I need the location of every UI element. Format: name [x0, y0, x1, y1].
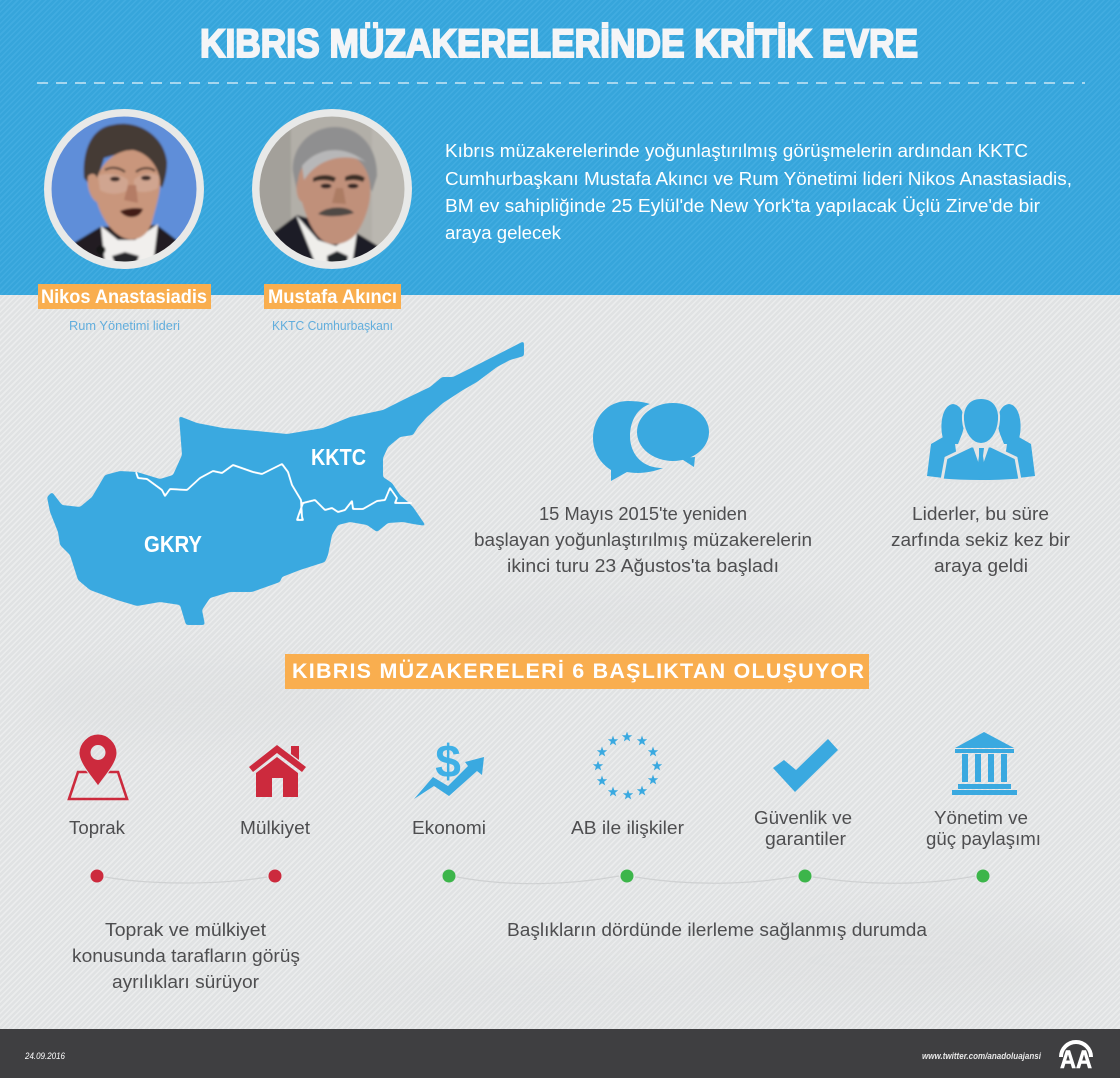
text: negotiations: ikinci turu 23 Ağustos'ta başladı: [507, 556, 779, 576]
label: Toprak: Toprak: [69, 818, 126, 838]
intro paragraph: BM ev sahipliğinde 25 Eylül'de New York'ta yapılacak Üçlü Zirve'de bir: [445, 196, 1040, 216]
intro paragraph: [445, 141, 1072, 243]
label: Yönetim ve güç paylaşımı: güç paylaşımı: [926, 829, 1041, 849]
icon: government building: [952, 732, 1017, 795]
text: leaders met: araya geldi: [934, 556, 1028, 576]
status dots: progress: [442, 870, 990, 882]
icon: group of leaders: [927, 398, 1035, 482]
label: Ekonomi: Ekonomi: [412, 818, 486, 838]
map of Cyprus: [47, 341, 524, 625]
icon: map pin: [69, 734, 127, 799]
label: Güvenlik ve garantiler: Güvenlik ve: [754, 808, 852, 828]
text: negotiations: başlayan yoğunlaştırılmış müzakerelerin: [474, 530, 812, 550]
text: negotiations: [474, 504, 812, 576]
text: progress note: Başlıkların dördünde ilerleme sağlanmış durumda: [507, 920, 928, 940]
icon: speech bubbles: [593, 401, 709, 481]
name tag: Mustafa Akıncı: Mustafa Akıncı: [268, 287, 397, 308]
text: leaders met: [891, 504, 1070, 576]
text: disagreement note: [72, 920, 300, 992]
logo: AA: AA: [1060, 1046, 1092, 1074]
text: leaders met: Liderler, bu süre: [912, 504, 1049, 524]
title: KIBRIS MÜZAKERELERİNDE KRİTİK EVRE: [200, 21, 918, 66]
footer link: www.twitter.com/anadoluajansi: [922, 1051, 1041, 1062]
icon: check mark: [773, 739, 838, 792]
label: Güvenlik ve garantiler: [754, 808, 852, 849]
text: disagreement note: Toprak ve mülkiyet: [105, 920, 266, 940]
label: Güvenlik ve garantiler: garantiler: [765, 829, 846, 849]
map label: KKTC: KKTC: [311, 444, 366, 470]
text: disagreement note: ayrılıkları sürüyor: [112, 972, 259, 992]
label: AB ile ilişkiler: AB ile ilişkiler: [571, 818, 684, 838]
status dots: disagreement: [90, 870, 282, 882]
intro paragraph: araya gelecek: [445, 223, 562, 243]
footer date: 24.09.2016: [24, 1051, 65, 1061]
role: KKTC Cumhurbaşkanı: KKTC Cumhurbaşkanı: [272, 319, 393, 333]
intro paragraph: Kıbrıs müzakerelerinde yoğunlaştırılmış görüşmelerin ardından KKTC: [445, 141, 1028, 161]
text: negotiations: 15 Mayıs 2015'te yeniden: [539, 504, 747, 524]
label: Yönetim ve güç paylaşımı: [926, 808, 1041, 849]
portrait: Mustafa Akıncı: [252, 109, 412, 270]
section banner: KIBRIS MÜZAKERELERİ 6 BAŞLIKTAN OLUŞUYOR: [292, 658, 864, 683]
label: Mülkiyet: Mülkiyet: [240, 818, 310, 838]
portrait: Nikos Anastasiadis: [44, 109, 204, 270]
section banner: [285, 654, 869, 689]
name tag: Nikos Anastasiadis: Nikos Anastasiadis: [41, 287, 207, 308]
text: leaders met: zarfında sekiz kez bir: [891, 530, 1070, 550]
icon: house: [249, 745, 306, 797]
map label: GKRY: GKRY: [144, 531, 202, 557]
label: Yönetim ve güç paylaşımı: Yönetim ve: [934, 808, 1028, 828]
role: Rum Yönetimi lideri: Rum Yönetimi lideri: [69, 319, 180, 333]
intro paragraph: Cumhurbaşkanı Mustafa Akıncı ve Rum Yönetimi lideri Nikos Anastasiadis,: [445, 169, 1072, 189]
icon: economy: $: [435, 735, 461, 787]
text: disagreement note: konusunda tarafların görüş: [72, 946, 300, 966]
icon: EU stars: [593, 732, 662, 799]
icon: economy: [414, 735, 484, 799]
